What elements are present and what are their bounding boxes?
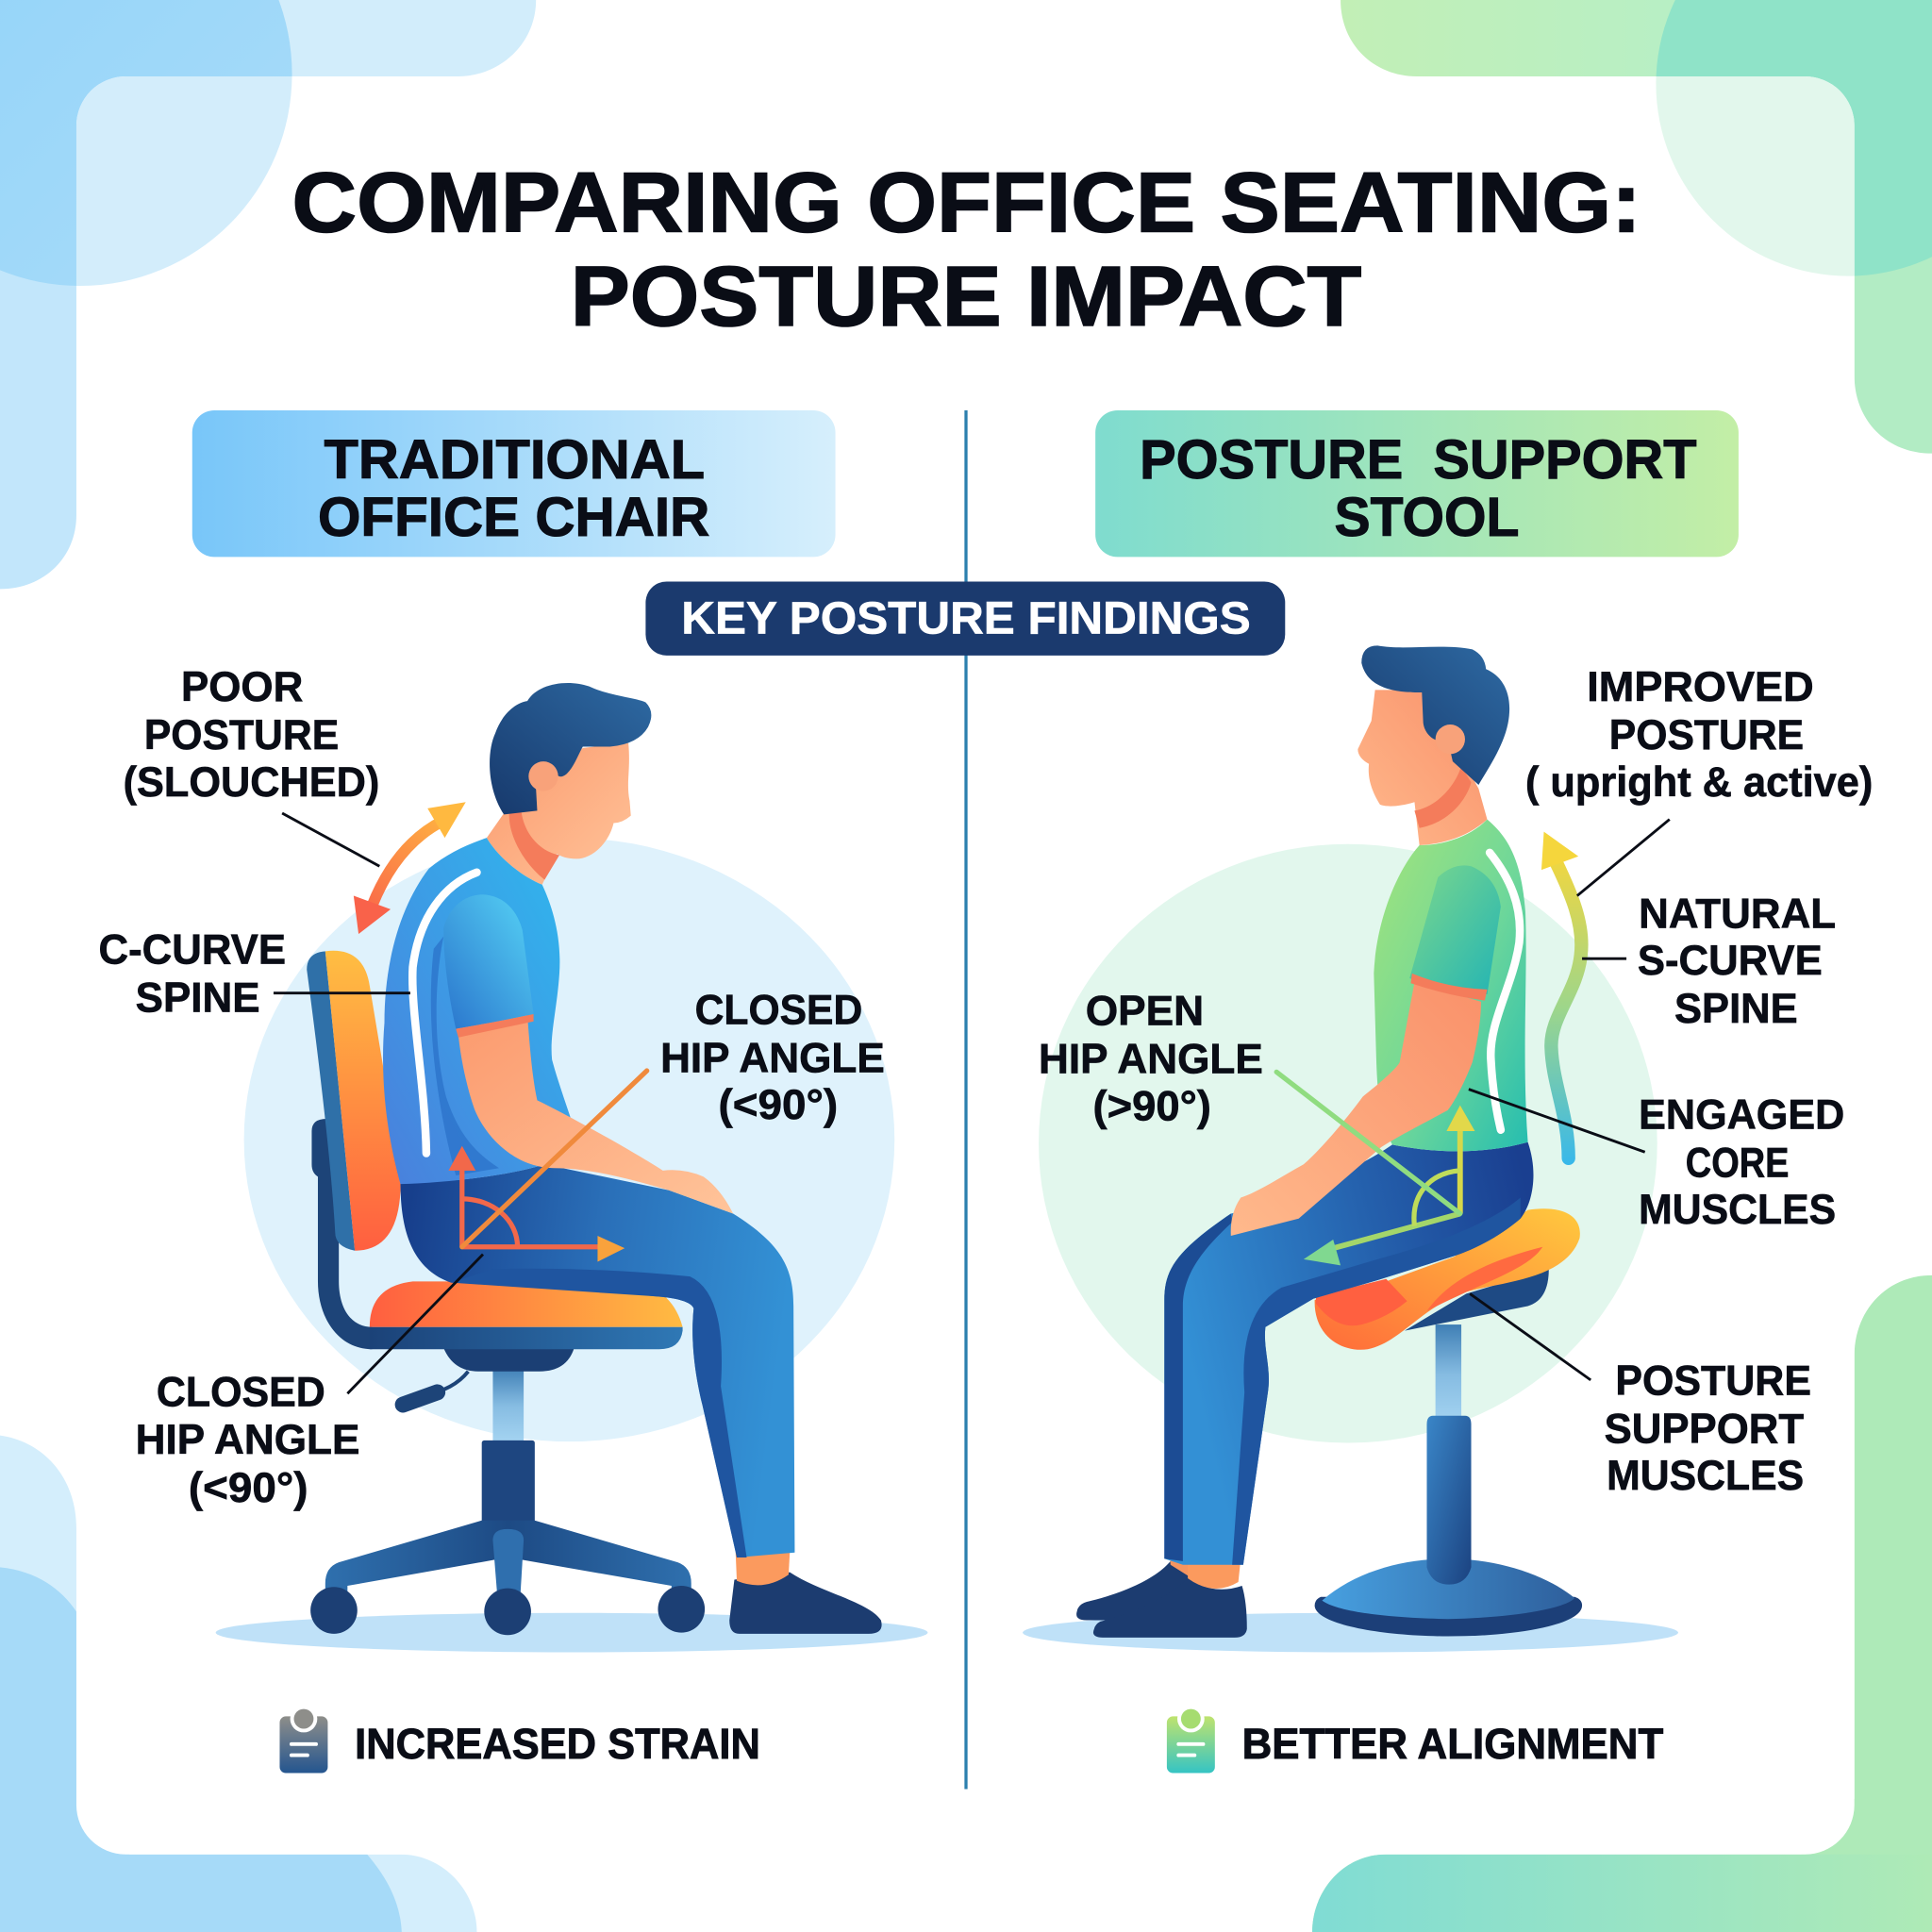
back ankle xyxy=(1168,1534,1191,1577)
neck and face xyxy=(487,743,631,885)
hip angle marker left xyxy=(448,1071,647,1261)
stool base xyxy=(1315,1558,1582,1637)
label: poor posture xyxy=(124,664,379,806)
seated person left xyxy=(383,683,882,1634)
label: open hip angle: (>90°) xyxy=(1093,1083,1211,1129)
label: natural s-curve spine: NATURAL xyxy=(1639,891,1836,938)
ground shadow left xyxy=(216,1613,928,1653)
forearm and hand xyxy=(458,1015,733,1214)
seat cushion xyxy=(370,1281,683,1327)
ear xyxy=(528,761,558,791)
shirt xyxy=(383,838,571,1184)
label: posture support muscles: POSTURE xyxy=(1615,1358,1811,1405)
sleeve xyxy=(1409,865,1501,994)
label: closed hip angle upper: HIP ANGLE xyxy=(660,1035,885,1081)
title xyxy=(292,156,1641,344)
backdrop circle left xyxy=(244,838,894,1441)
label: c-curve spine xyxy=(98,926,286,1021)
height lever xyxy=(403,1372,468,1405)
ankle xyxy=(736,1553,790,1585)
trousers xyxy=(400,1164,794,1557)
chair frame xyxy=(311,1119,372,1349)
saddle seat xyxy=(1315,1208,1580,1350)
front shoe xyxy=(1093,1578,1247,1638)
label: engaged core muscles: MUSCLES xyxy=(1639,1187,1836,1233)
stool piston xyxy=(1436,1324,1461,1425)
spine highlight xyxy=(412,873,476,1154)
forearm and hand xyxy=(1231,982,1481,1236)
wheels xyxy=(310,1586,705,1635)
header: traditional office chair xyxy=(192,410,836,557)
gas cylinder xyxy=(492,1368,524,1444)
label: improved posture: IMPROVED xyxy=(1587,664,1814,710)
sleeve shadow xyxy=(1411,974,1487,1001)
label: poor posture: (SLOUCHED) xyxy=(124,759,379,806)
label: posture support muscles: SUPPORT xyxy=(1605,1406,1804,1452)
result: better alignment: BETTER ALIGNMENT xyxy=(1242,1720,1663,1768)
neck shadow xyxy=(1414,766,1472,828)
label: closed hip angle upper xyxy=(660,987,885,1128)
label: poor posture: POOR xyxy=(181,664,303,710)
label: closed hip angle lower: HIP ANGLE xyxy=(136,1417,359,1463)
label: closed hip angle lower: (<90°) xyxy=(189,1465,308,1511)
title: COMPARING OFFICE SEATING: xyxy=(292,156,1641,251)
center leg xyxy=(492,1529,524,1602)
shirt shading xyxy=(431,937,499,1175)
label: improved posture xyxy=(1525,664,1873,806)
label: closed hip angle upper: (<90°) xyxy=(718,1082,838,1128)
label: open hip angle: HIP ANGLE xyxy=(1039,1037,1263,1083)
label: natural s-curve spine: S-CURVE xyxy=(1638,938,1823,984)
hair xyxy=(1361,645,1509,785)
label: closed hip angle upper: CLOSED xyxy=(695,987,862,1033)
label: engaged core muscles: ENGAGED xyxy=(1639,1091,1844,1138)
ear xyxy=(1436,724,1465,754)
seat pan xyxy=(370,1327,683,1349)
callout lines right xyxy=(1469,820,1670,1380)
seated person right xyxy=(1076,645,1580,1638)
label: open hip angle xyxy=(1039,989,1263,1129)
hair xyxy=(490,683,651,814)
label: open hip angle: OPEN xyxy=(1086,989,1204,1035)
header: traditional office chair: OFFICE CHAIR xyxy=(318,487,709,548)
label: c-curve spine: SPINE xyxy=(136,974,260,1021)
ground shadow right xyxy=(1023,1613,1678,1653)
stool column xyxy=(1426,1416,1472,1585)
label: c-curve spine: C-CURVE xyxy=(98,926,286,973)
label: improved posture: POSTURE xyxy=(1609,712,1804,758)
label: improved posture: ( upright & active) xyxy=(1525,759,1873,806)
key findings pill xyxy=(645,581,1285,656)
title: POSTURE IMPACT xyxy=(571,249,1361,344)
stool seat base xyxy=(1405,1269,1549,1331)
office chair xyxy=(307,951,705,1635)
back shoe xyxy=(1076,1561,1201,1621)
label: engaged core muscles: CORE xyxy=(1686,1140,1789,1186)
sleeve xyxy=(443,894,534,1029)
label: closed hip angle lower xyxy=(136,1369,359,1511)
icon: clipboard alignment xyxy=(1167,1706,1215,1774)
s-curve spine arrow right xyxy=(1541,832,1581,1158)
trousers xyxy=(1164,1142,1533,1565)
label: poor posture: POSTURE xyxy=(144,712,339,758)
header: traditional office chair: TRADITIONAL xyxy=(325,429,705,491)
panel corner tints xyxy=(76,76,1855,286)
chair backrest xyxy=(307,951,401,1251)
shoe xyxy=(729,1573,882,1634)
sleeve shadow xyxy=(456,1014,534,1038)
curved posture arrow left xyxy=(354,802,466,934)
chair base legs xyxy=(325,1521,691,1602)
label: natural s-curve spine xyxy=(1638,891,1836,1032)
label: engaged core muscles xyxy=(1639,1091,1844,1233)
result: increased strain: INCREASED STRAIN xyxy=(355,1720,760,1768)
header: posture support stool: POSTURE SUPPORT xyxy=(1140,429,1697,491)
label: posture support muscles: MUSCLES xyxy=(1607,1453,1804,1499)
key findings pill: KEY POSTURE FINDINGS xyxy=(681,592,1251,643)
center divider xyxy=(965,410,967,1789)
chair column xyxy=(482,1441,535,1526)
posture support stool xyxy=(1315,1269,1582,1637)
header: posture support stool: STOOL xyxy=(1335,487,1519,548)
shirt xyxy=(1374,820,1528,1151)
icon: clipboard strain xyxy=(279,1706,327,1774)
backdrop circle right xyxy=(1039,844,1657,1442)
label: natural s-curve spine: SPINE xyxy=(1674,986,1798,1032)
front ankle xyxy=(1188,1558,1241,1589)
label: posture support muscles xyxy=(1605,1358,1811,1499)
callout lines left xyxy=(274,813,483,1393)
hip angle marker right xyxy=(1276,1072,1474,1265)
neck and face xyxy=(1357,690,1487,845)
neck shadow xyxy=(509,789,559,880)
header: posture support stool xyxy=(1095,410,1739,557)
spine highlight xyxy=(1490,853,1520,1130)
seat mechanism xyxy=(443,1348,575,1372)
label: closed hip angle lower: CLOSED xyxy=(157,1369,325,1415)
